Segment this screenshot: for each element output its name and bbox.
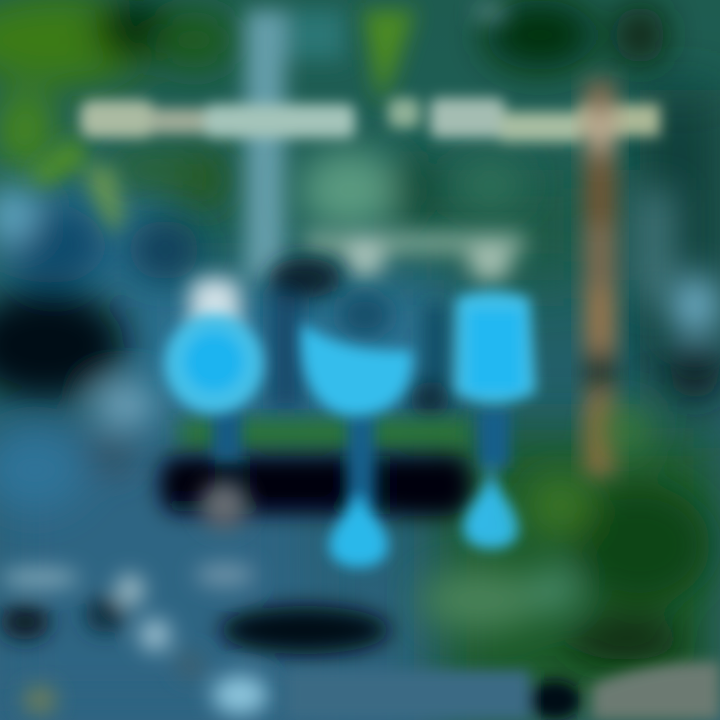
icon: water drop right (463, 478, 519, 550)
icon: tall water bottle (454, 291, 536, 404)
green band (180, 420, 470, 448)
foreground plants lower right (420, 275, 720, 660)
foliage at top (0, 0, 665, 210)
subtitle: pale blurred band (305, 232, 525, 282)
bottom ledge (285, 662, 720, 720)
title: illegible blurred band (80, 98, 660, 142)
white cap above round container (190, 278, 240, 334)
black soil (160, 456, 470, 516)
icon: bowl water container (301, 322, 412, 416)
waterfall stream (245, 5, 505, 280)
foreground stones lower left (0, 563, 390, 715)
wooden post (584, 80, 616, 480)
green glow mid panel (300, 150, 675, 300)
leaf blades (30, 10, 415, 235)
icon: round water container (164, 314, 264, 414)
connector pipes (212, 408, 510, 512)
dark rocks on left (0, 189, 200, 510)
soil highlight (200, 481, 248, 529)
dark stem behind containers (269, 258, 450, 418)
icon: water drop centre (329, 492, 388, 568)
